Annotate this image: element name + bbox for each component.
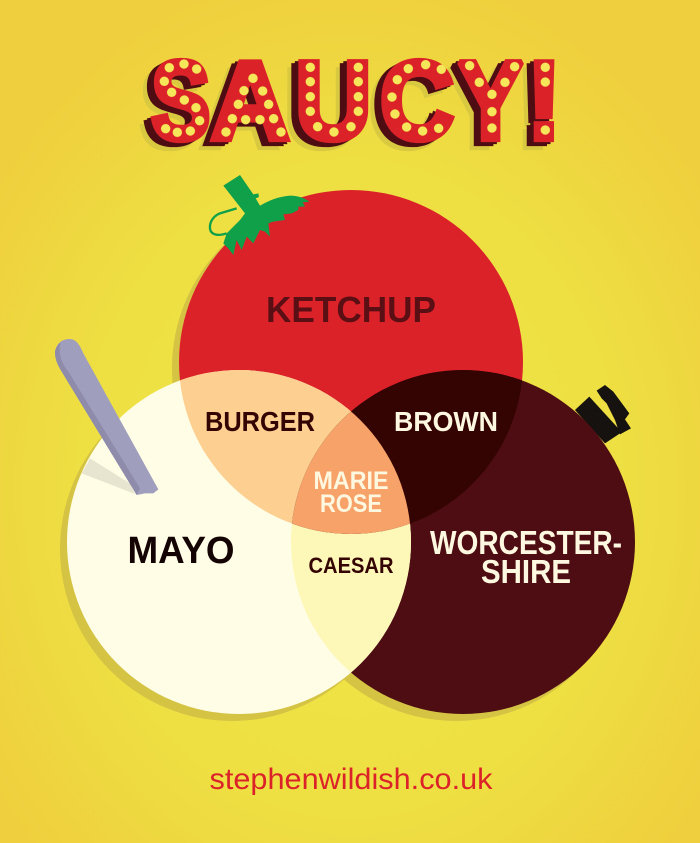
title extrusion near: [148, 40, 558, 166]
title extrusion near: !: [524, 40, 558, 165]
icon: worcestershire bottle cap: [575, 385, 631, 443]
title extrusion far: Y: [451, 43, 516, 167]
label: brown: BROWN: [394, 406, 498, 437]
venn: worcestershire circle: [291, 370, 635, 714]
title soft shadow: !: [516, 46, 550, 171]
title extrusion far: U: [288, 44, 365, 168]
venn: mayo circle: [67, 370, 411, 714]
title extrusion near: S: [148, 42, 207, 165]
title extrusion far: S: [144, 44, 203, 167]
icon: knife shadow in mayo: [82, 458, 135, 494]
marquee bulbs: [160, 59, 550, 137]
label: marie rose: [314, 467, 388, 518]
circle shadows: [60, 196, 628, 721]
label: ketchup: KETCHUP: [266, 289, 436, 330]
title extrusion far: A: [204, 44, 282, 167]
label: worcestershire: SHIRE: [481, 553, 571, 590]
venn: marie rose overlap: [292, 412, 410, 534]
label: mayo: MAYO: [128, 530, 234, 572]
label: worcestershire: [430, 524, 622, 590]
title letters: A: [211, 40, 289, 163]
label: caesar: CAESAR: [308, 553, 394, 578]
venn: burger overlap: [180, 370, 351, 524]
title extrusion near: A: [208, 42, 286, 165]
label: burger: BURGER: [205, 406, 315, 437]
title: SAUCY!: [140, 38, 561, 172]
website url: stephenwildish.co.uk: [210, 763, 494, 796]
title extrusion far: C: [373, 42, 447, 167]
title soft shadow: Y: [447, 47, 512, 171]
title letters: [151, 38, 561, 164]
title letters: U: [295, 40, 372, 164]
title extrusion far: [144, 42, 554, 168]
title letters: !: [527, 38, 561, 163]
venn: brown overlap: [292, 370, 522, 534]
icon: knife: [55, 339, 158, 495]
label: marie rose: MARIE: [314, 467, 388, 495]
title soft shadow: A: [200, 48, 278, 171]
title letters: Y: [458, 39, 523, 163]
title extrusion near: U: [292, 42, 368, 166]
venn: caesar overlap: [291, 524, 411, 672]
icon: tomato stalk: [210, 175, 309, 255]
title soft shadow: [140, 46, 550, 172]
venn: ketchup circle: [179, 190, 523, 534]
label: marie rose: ROSE: [320, 490, 382, 518]
title extrusion far: !: [520, 42, 554, 167]
title letters: S: [151, 40, 210, 163]
title soft shadow: S: [140, 48, 199, 171]
title extrusion near: C: [376, 40, 451, 165]
label: worcestershire: WORCESTER-: [430, 524, 622, 561]
title extrusion near: Y: [454, 41, 520, 165]
title soft shadow: U: [284, 48, 361, 172]
title letters: C: [380, 38, 454, 163]
title soft shadow: C: [369, 46, 443, 171]
